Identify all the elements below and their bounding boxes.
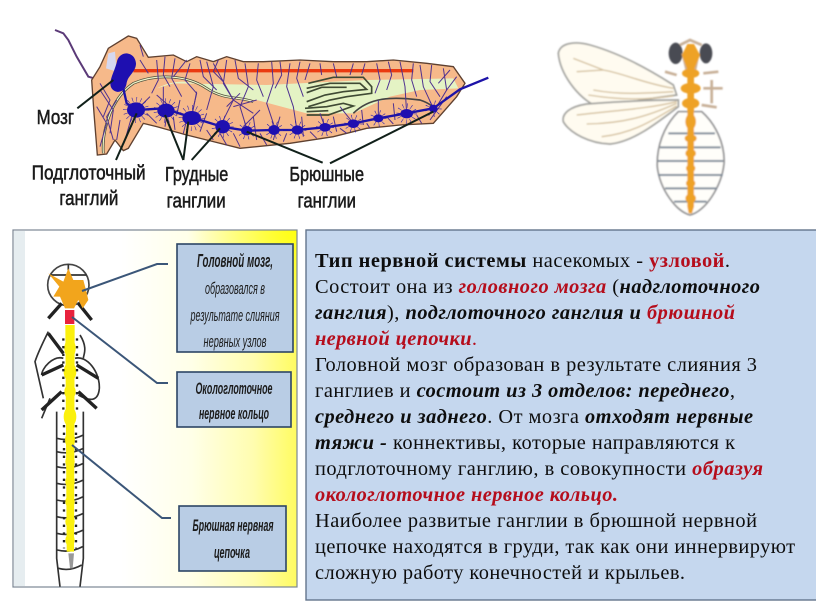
brain star [48, 268, 88, 308]
callout: Брюшная нервная цепочка: Брюшная нервная [192, 516, 274, 535]
insect body outline [92, 36, 465, 155]
description text: Состоит она из головного мозга (надглоточного [315, 276, 760, 298]
label: Мозг: Мозг [37, 106, 74, 129]
label: Грудные ганглии: ганглии [167, 189, 226, 212]
gut coils [305, 77, 372, 115]
text panel background [306, 230, 816, 600]
description text: нервной цепочки. [315, 328, 477, 350]
body and legs [35, 264, 99, 587]
description text: Тип нервной системы насекомых - узловой. [315, 250, 730, 272]
description text [315, 250, 795, 584]
nerve cord [123, 78, 488, 131]
description text: ганглиев и состоит из 3 отделов: переднего, [315, 380, 735, 402]
thorax and legs [665, 40, 723, 107]
connector lines [72, 264, 171, 518]
description text: Наиболее развитые ганглии в брюшной нервной [315, 510, 757, 532]
label: Подглоточный ганглий: Подглоточный [32, 161, 146, 184]
callout: Головной мозг [177, 244, 293, 352]
brain [110, 53, 136, 92]
winged insect top view [558, 40, 724, 215]
label: Грудные ганглии: Грудные [165, 163, 228, 186]
callout: Головной мозг: Головной мозг, [197, 251, 273, 271]
description text: цепочке находятся в груди, так как они иннервируют [315, 536, 795, 558]
label: Брюшные ганглии: ганглии [298, 189, 356, 212]
description text: ганглия), подглоточного ганглия и брюшной [315, 302, 735, 324]
gut [157, 78, 458, 113]
dorsal vessel [133, 66, 413, 76]
label: Грудные ганглии [165, 163, 228, 212]
upper wing [558, 43, 677, 107]
legs dark [42, 303, 98, 410]
panel: nervous system scheme [13, 230, 297, 587]
ventral nerve chain [64, 325, 76, 552]
callout: Окологлоточное нервное кольцо: нервное кольцо [199, 404, 269, 423]
eye patch [106, 52, 117, 72]
label: Брюшные ганглии: Брюшные [289, 163, 364, 186]
ganglion rays [125, 99, 439, 137]
description text: Головной мозг образован в результате слияния 3 [315, 354, 757, 376]
eyes [669, 43, 683, 64]
callout: Окологлоточное нервное кольцо [177, 372, 291, 427]
label: Подглоточный ганглий [32, 161, 146, 210]
trachea veins [97, 45, 457, 147]
head capsule [48, 264, 89, 306]
label: Брюшные ганглии [289, 163, 364, 212]
abdominal segments [658, 133, 723, 202]
description text: тяжи - коннективы, которые направляются к [315, 432, 735, 454]
insect side view diagram [32, 30, 488, 212]
description text: подглоточному ганглию, в совокупности образуя [315, 458, 763, 480]
antenna [55, 30, 100, 80]
abdomen tip [68, 553, 74, 568]
wing veins [573, 58, 677, 137]
abdomen [657, 112, 724, 215]
description text: среднего и заднего. От мозга отходят нервные [315, 406, 753, 428]
insect top view scheme [35, 264, 99, 587]
description text: сложную работу конечностей и крыльев. [315, 562, 685, 584]
panel background [13, 230, 297, 587]
pointer lines [77, 80, 433, 163]
lower wing [563, 100, 678, 144]
description text: окологлоточное нервное кольцо. [315, 484, 618, 506]
label: Подглоточный ганглий: ганглий [59, 187, 118, 210]
oesophagus tube [103, 77, 253, 153]
callout: Головной мозг: результате слияния [190, 307, 280, 325]
subpharyngeal ganglion [65, 310, 74, 324]
callout: Брюшная нервная цепочка [179, 506, 286, 571]
ganglion dots [63, 338, 77, 548]
panel: text description [306, 230, 816, 600]
callout: Окологлоточное нервное кольцо: Окологлоточное [196, 379, 272, 398]
callout: Головной мозг: образовался в [205, 280, 265, 298]
callout: Головной мозг: нервных узлов [204, 333, 267, 351]
ganglia [127, 102, 438, 135]
callout: Брюшная нервная цепочка: цепочка [214, 543, 250, 562]
orange nerve cord [681, 44, 701, 213]
